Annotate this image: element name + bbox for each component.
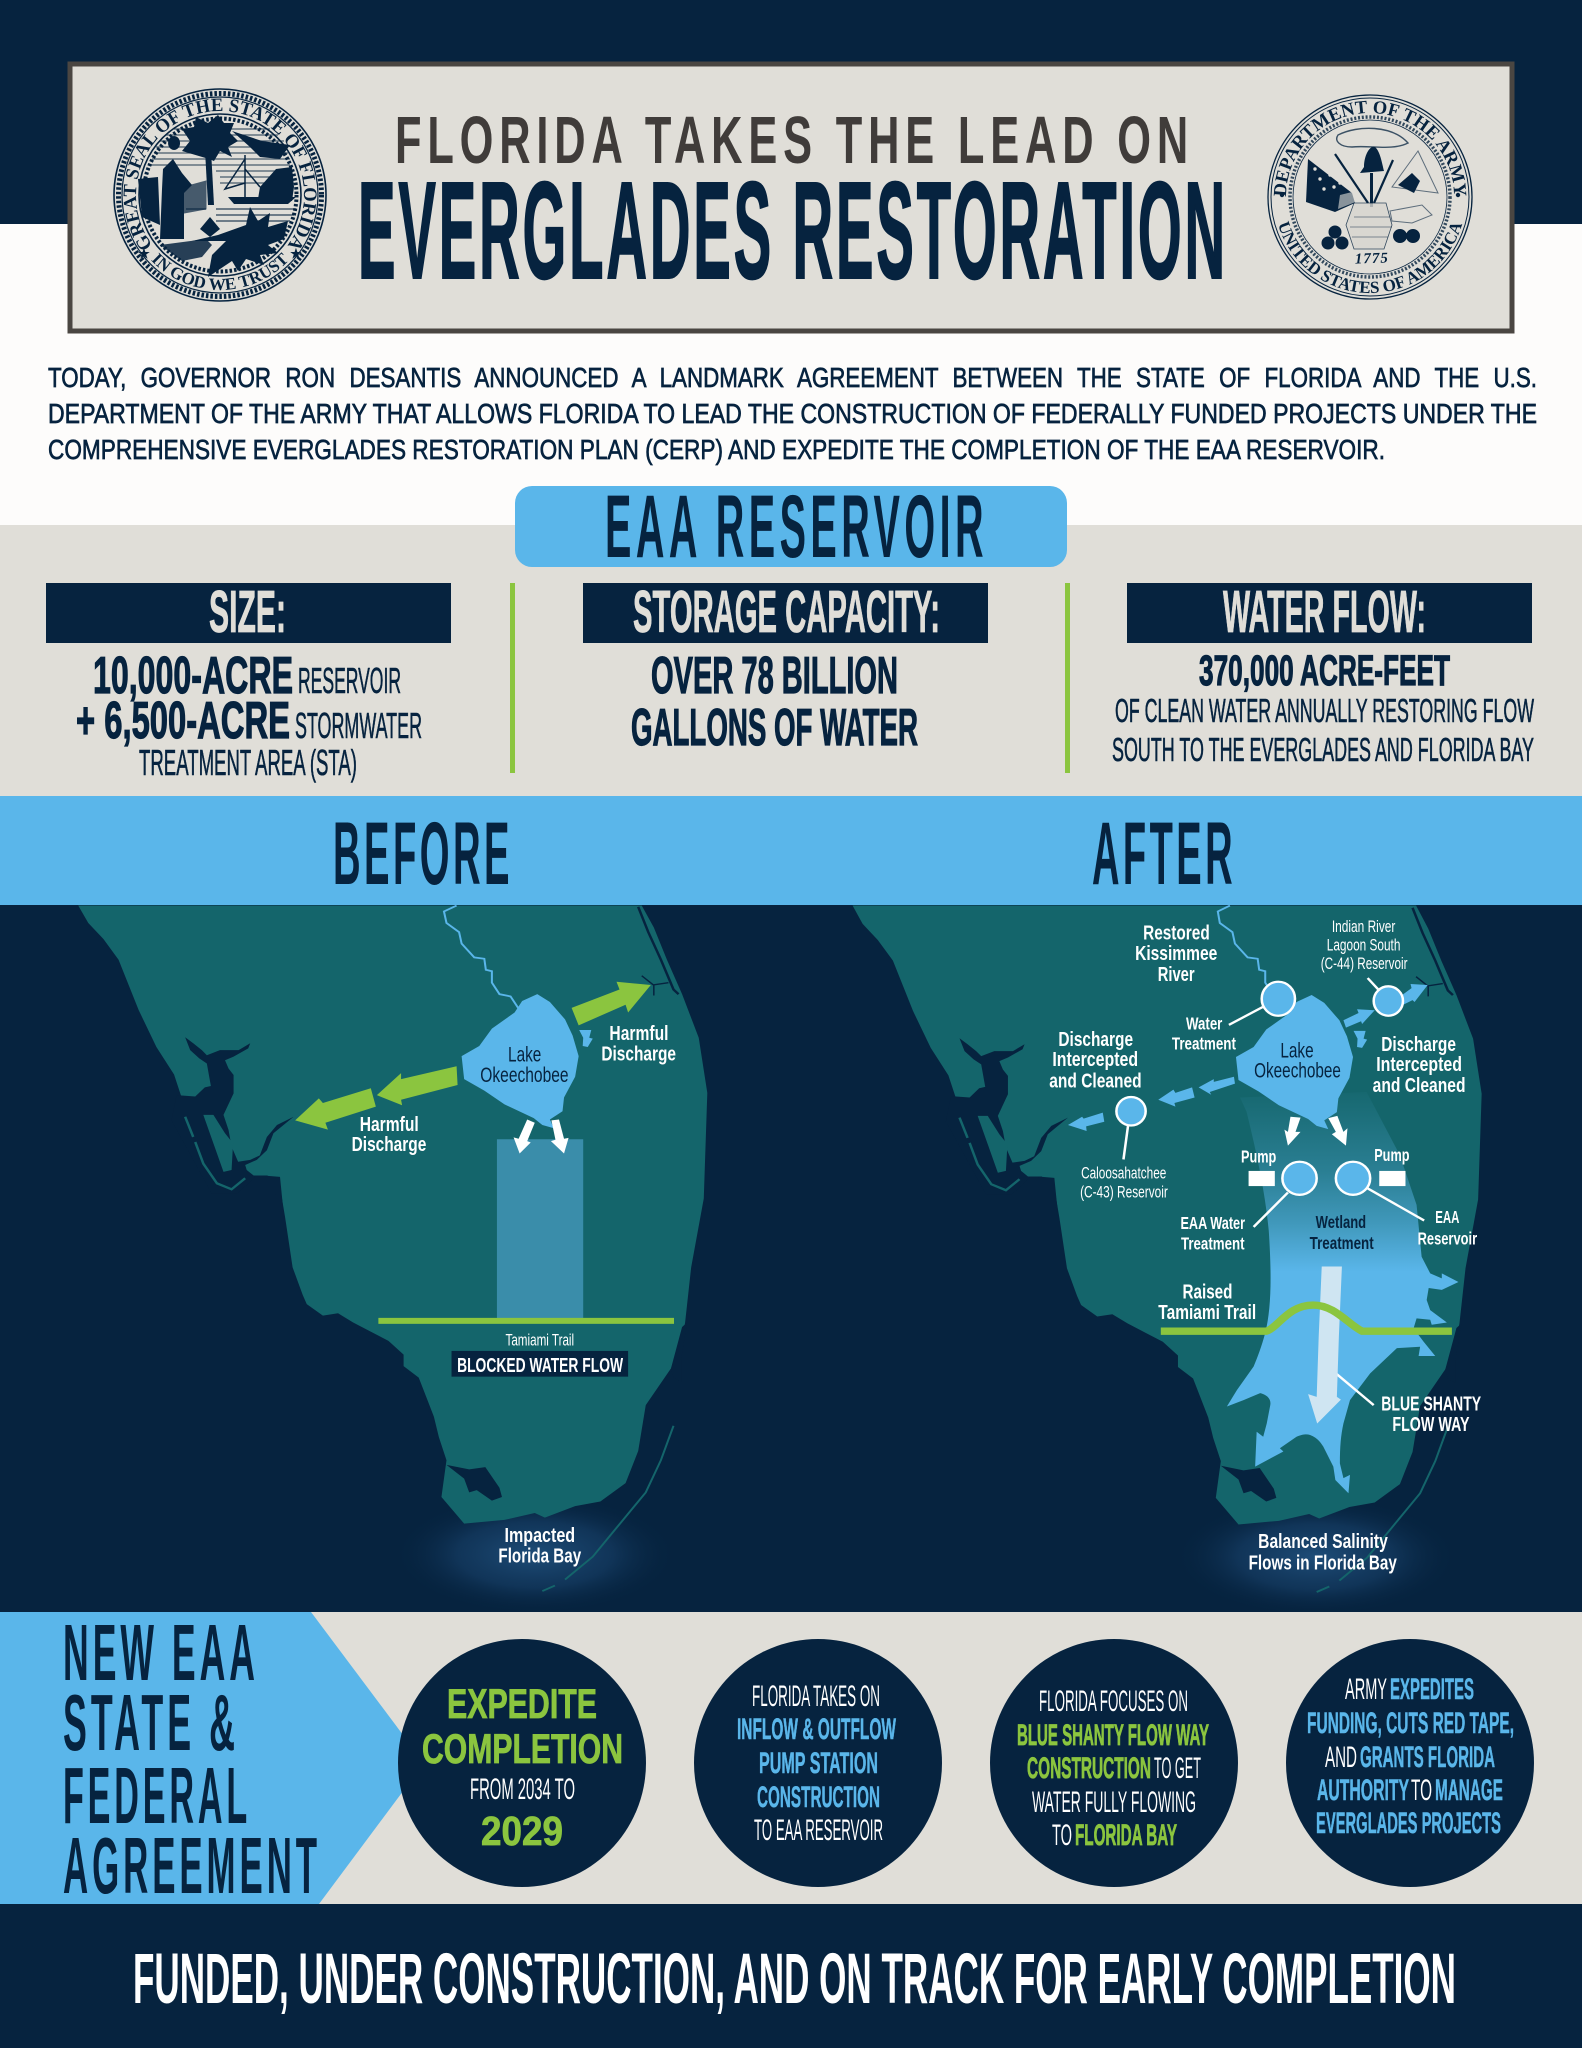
label: raised Tamiami Trail: Tamiami Trail xyxy=(1158,1302,1256,1324)
label: wetland treatment: Wetland xyxy=(1316,1212,1366,1232)
circle: Army expedites funding xyxy=(1286,1639,1534,1887)
lake: Okeechobee xyxy=(462,994,593,1128)
seal: State of Florida: IN GOD WE TRUST xyxy=(151,252,288,290)
stat: size: TREATMENT AREA (STA) xyxy=(139,742,357,783)
circle: inflow and outflow pump station: CONSTRUCTION xyxy=(757,1781,880,1814)
label: EAA reservoir: EAA xyxy=(1435,1207,1459,1227)
label: restored Kissimmee River xyxy=(1135,922,1217,986)
blocked flow column xyxy=(497,1139,583,1318)
circle: inflow and outflow pump station: INFLOW & OUTFLOW xyxy=(737,1713,896,1746)
label: blocked water flow xyxy=(452,1351,628,1377)
circle: Blue Shanty flow way construction: CONSTRUCTION xyxy=(1027,1752,1151,1785)
before and after header band: AFTER xyxy=(1092,803,1236,903)
label: discharge intercepted west: Discharge xyxy=(1058,1029,1133,1051)
circle: Blue Shanty flow way construction: TO xyxy=(1052,1819,1072,1852)
maps background xyxy=(0,905,1582,1613)
circle: expedite completion: EXPEDITE xyxy=(447,1680,597,1727)
label: Blue Shanty Flow Way xyxy=(1381,1393,1481,1436)
label: Indian River Lagoon South reservoir: Lagoon South xyxy=(1327,935,1400,954)
circle: Blue Shanty flow way construction xyxy=(990,1639,1238,1887)
label: harmful discharge west xyxy=(352,1114,426,1156)
circle: expedite completion: 2029 xyxy=(481,1808,563,1854)
circle: Blue Shanty flow way construction: FLORIDA BAY xyxy=(1075,1819,1177,1852)
label: restored Kissimmee River: River xyxy=(1158,964,1195,986)
lake: Okeechobee: Okeechobee xyxy=(1254,1059,1341,1082)
circle: inflow and outflow pump station: TO EAA RESERVOIR xyxy=(754,1814,883,1847)
label: harmful discharge east: Harmful xyxy=(609,1023,668,1045)
river: Kissimmee xyxy=(444,906,521,1013)
label: discharge intercepted east: Intercepted xyxy=(1376,1054,1462,1076)
callout lines xyxy=(1123,978,1424,1405)
label: wetland treatment: Treatment xyxy=(1310,1233,1374,1253)
circle: Blue Shanty flow way construction: BLUE SHANTY FLOW WAY xyxy=(1017,1719,1209,1752)
Tamiami Trail line xyxy=(378,1318,674,1324)
label: EAA reservoir xyxy=(1418,1207,1477,1248)
agreement heading: NEW EAA xyxy=(63,1608,259,1697)
land: south Florida xyxy=(853,906,1482,1592)
circle: Army expedites funding: TO xyxy=(1411,1774,1432,1807)
label: balanced salinity: Balanced Salinity xyxy=(1258,1531,1388,1553)
before and after header band xyxy=(0,796,1582,906)
center flow arrow xyxy=(1308,1266,1342,1423)
label: Indian River Lagoon South reservoir: Indian River xyxy=(1332,917,1396,936)
circle: Blue Shanty flow way construction: TO GET xyxy=(1154,1752,1201,1785)
seal: State of Florida: GREAT SEAL OF THE STATE OF FLORIDA xyxy=(123,98,317,250)
label: raised Tamiami Trail xyxy=(1158,1281,1256,1324)
arrows: west discharge xyxy=(1068,1077,1235,1131)
label: discharge intercepted east xyxy=(1373,1034,1466,1097)
label: pump east: Pump xyxy=(1374,1145,1410,1165)
circle: expedite completion: FROM 2034 TO xyxy=(470,1773,575,1806)
project circles xyxy=(1116,982,1403,1195)
map: after xyxy=(853,906,1482,1616)
circle: Blue Shanty flow way construction: FLORIDA FOCUSES ON xyxy=(1039,1685,1188,1718)
arrow: east harmful discharge xyxy=(572,982,651,1025)
label: Tamiami Trail: Tamiami Trail xyxy=(506,1330,574,1349)
label: discharge intercepted west: Intercepted xyxy=(1052,1049,1138,1071)
circle: Army expedites funding: AND xyxy=(1325,1741,1357,1774)
seal: Department of the Army: DEPARTMENT OF THE ARMY xyxy=(1274,100,1466,196)
stat: size: STORMWATER xyxy=(295,705,422,746)
agreement heading: FEDERAL xyxy=(63,1751,251,1840)
seal: State of Florida xyxy=(113,88,327,302)
label: water treatment: Treatment xyxy=(1172,1034,1236,1054)
label: blocked water flow: BLOCKED WATER FLOW xyxy=(457,1355,623,1377)
circle: inflow and outflow pump station: FLORIDA TAKES ON xyxy=(752,1680,880,1713)
circle: Army expedites funding: ARMY xyxy=(1345,1673,1387,1706)
label: Blue Shanty Flow Way: BLUE SHANTY xyxy=(1381,1393,1481,1415)
map: before xyxy=(78,906,707,1614)
label: discharge intercepted west xyxy=(1049,1029,1142,1092)
label: Caloosahatchee reservoir xyxy=(1080,1164,1168,1201)
lake: Okeechobee: Lake xyxy=(1280,1038,1314,1062)
stat: storage capacity xyxy=(583,579,988,757)
footer band xyxy=(0,1904,1582,2048)
stat: storage capacity: OVER 78 BILLION xyxy=(651,647,898,705)
label: EAA water treatment: EAA Water xyxy=(1180,1213,1245,1233)
label: Caloosahatchee reservoir: (C-43) Reservoir xyxy=(1080,1182,1168,1201)
divider line one xyxy=(510,583,515,773)
before and after header band: BEFORE xyxy=(333,803,513,903)
seal: Department of the Army: UNITED STATES OF AMERICA xyxy=(1279,220,1462,294)
label: restored Kissimmee River: Restored xyxy=(1143,922,1210,944)
label: impacted Florida Bay: Impacted xyxy=(505,1525,575,1547)
circle: expedite completion xyxy=(398,1639,646,1887)
top navy band xyxy=(0,0,1582,224)
stat: storage capacity: STORAGE CAPACITY: xyxy=(633,579,940,645)
label: harmful discharge west: Harmful xyxy=(360,1114,419,1136)
stat: size: 10,000-ACRE xyxy=(93,647,293,705)
arrow: west harmful discharge upper xyxy=(377,1066,458,1105)
agreement heading xyxy=(0,1608,424,1910)
circle: inflow and outflow pump station xyxy=(694,1639,942,1887)
arrows: southward flow xyxy=(1284,1116,1347,1146)
label: harmful discharge west: Discharge xyxy=(352,1134,426,1156)
label: raised Tamiami Trail: Raised xyxy=(1182,1281,1232,1303)
label: balanced salinity: Flows in Florida Bay xyxy=(1249,1552,1397,1574)
label: Blue Shanty Flow Way: FLOW WAY xyxy=(1392,1414,1470,1436)
label: impacted Florida Bay: Florida Bay xyxy=(498,1545,581,1567)
label: Caloosahatchee reservoir: Caloosahatchee xyxy=(1081,1164,1166,1183)
stat: size: SIZE: xyxy=(209,579,286,645)
label: restored Kissimmee River: Kissimmee xyxy=(1135,943,1217,965)
stat: water flow xyxy=(1112,579,1534,768)
river: Kissimmee xyxy=(1218,906,1273,994)
label: Indian River Lagoon South reservoir xyxy=(1321,917,1408,973)
label: discharge intercepted west: and Cleaned xyxy=(1049,1070,1142,1092)
label: impacted Florida Bay xyxy=(498,1525,581,1567)
bay glow xyxy=(1174,1497,1457,1616)
intro paragraph xyxy=(48,362,1537,465)
circle: Army expedites funding: EXPEDITES xyxy=(1390,1673,1474,1706)
arrow: west harmful discharge lower xyxy=(295,1088,376,1130)
label: discharge intercepted east: Discharge xyxy=(1381,1034,1456,1056)
label: harmful discharge east xyxy=(601,1023,676,1065)
lake: Okeechobee: Lake xyxy=(508,1043,541,1066)
label: pump west: Pump xyxy=(1241,1146,1276,1166)
circle: Army expedites funding: MANAGE xyxy=(1435,1774,1503,1807)
circle: Blue Shanty flow way construction: WATER FULLY FLOWING xyxy=(1032,1786,1196,1819)
seal: Department of the Army: 1775 xyxy=(1355,250,1389,268)
label: water treatment xyxy=(1172,1013,1236,1054)
seal: Department of the Army xyxy=(1267,94,1473,300)
label: balanced salinity xyxy=(1249,1531,1397,1574)
divider line two xyxy=(1065,583,1070,773)
agreement heading: AGREEMENT xyxy=(63,1821,321,1910)
heading pill: EAA Reservoir: EAA RESERVOIR xyxy=(605,476,988,576)
label: water treatment: Water xyxy=(1186,1013,1222,1033)
label: EAA water treatment: Treatment xyxy=(1181,1233,1245,1253)
stat: storage capacity: GALLONS OF WATER xyxy=(631,699,918,757)
seal: State of Florida: ★ xyxy=(290,246,302,261)
label: Indian River Lagoon South reservoir: (C-44) Reservoir xyxy=(1321,954,1408,973)
stat: size: + 6,500-ACRE xyxy=(76,692,290,750)
lake: Okeechobee: Okeechobee xyxy=(480,1063,569,1087)
raised Tamiami Trail xyxy=(1161,1305,1452,1331)
title panel xyxy=(68,62,1514,334)
agreement heading: STATE & xyxy=(63,1678,239,1767)
panel: state and federal agreement xyxy=(0,1608,1582,1910)
seal: State of Florida: ★ xyxy=(138,246,150,261)
arrows: east discharge xyxy=(1343,984,1428,1028)
stat: size: RESERVOIR xyxy=(298,660,401,701)
label: EAA water treatment xyxy=(1180,1213,1245,1253)
label: discharge intercepted east: and Cleaned xyxy=(1373,1075,1466,1097)
Blue Shanty flow way xyxy=(1227,1092,1458,1493)
circle: Army expedites funding: AUTHORITY xyxy=(1317,1774,1409,1807)
lake: Okeechobee xyxy=(1236,995,1367,1129)
panel: EAA reservoir stats xyxy=(0,476,1582,796)
stat: size xyxy=(46,579,451,783)
label: wetland treatment xyxy=(1310,1212,1374,1253)
land: south Florida xyxy=(78,906,707,1591)
circle: inflow and outflow pump station: PUMP STATION xyxy=(759,1747,878,1780)
label: harmful discharge east: Discharge xyxy=(601,1043,676,1065)
bay glow xyxy=(394,1495,676,1614)
arrows: southward flow xyxy=(514,1119,569,1153)
heading pill: EAA Reservoir xyxy=(515,476,1067,576)
pumps xyxy=(1249,1171,1405,1186)
circle: expedite completion: COMPLETION xyxy=(422,1725,623,1772)
label: EAA reservoir: Reservoir xyxy=(1418,1228,1477,1248)
